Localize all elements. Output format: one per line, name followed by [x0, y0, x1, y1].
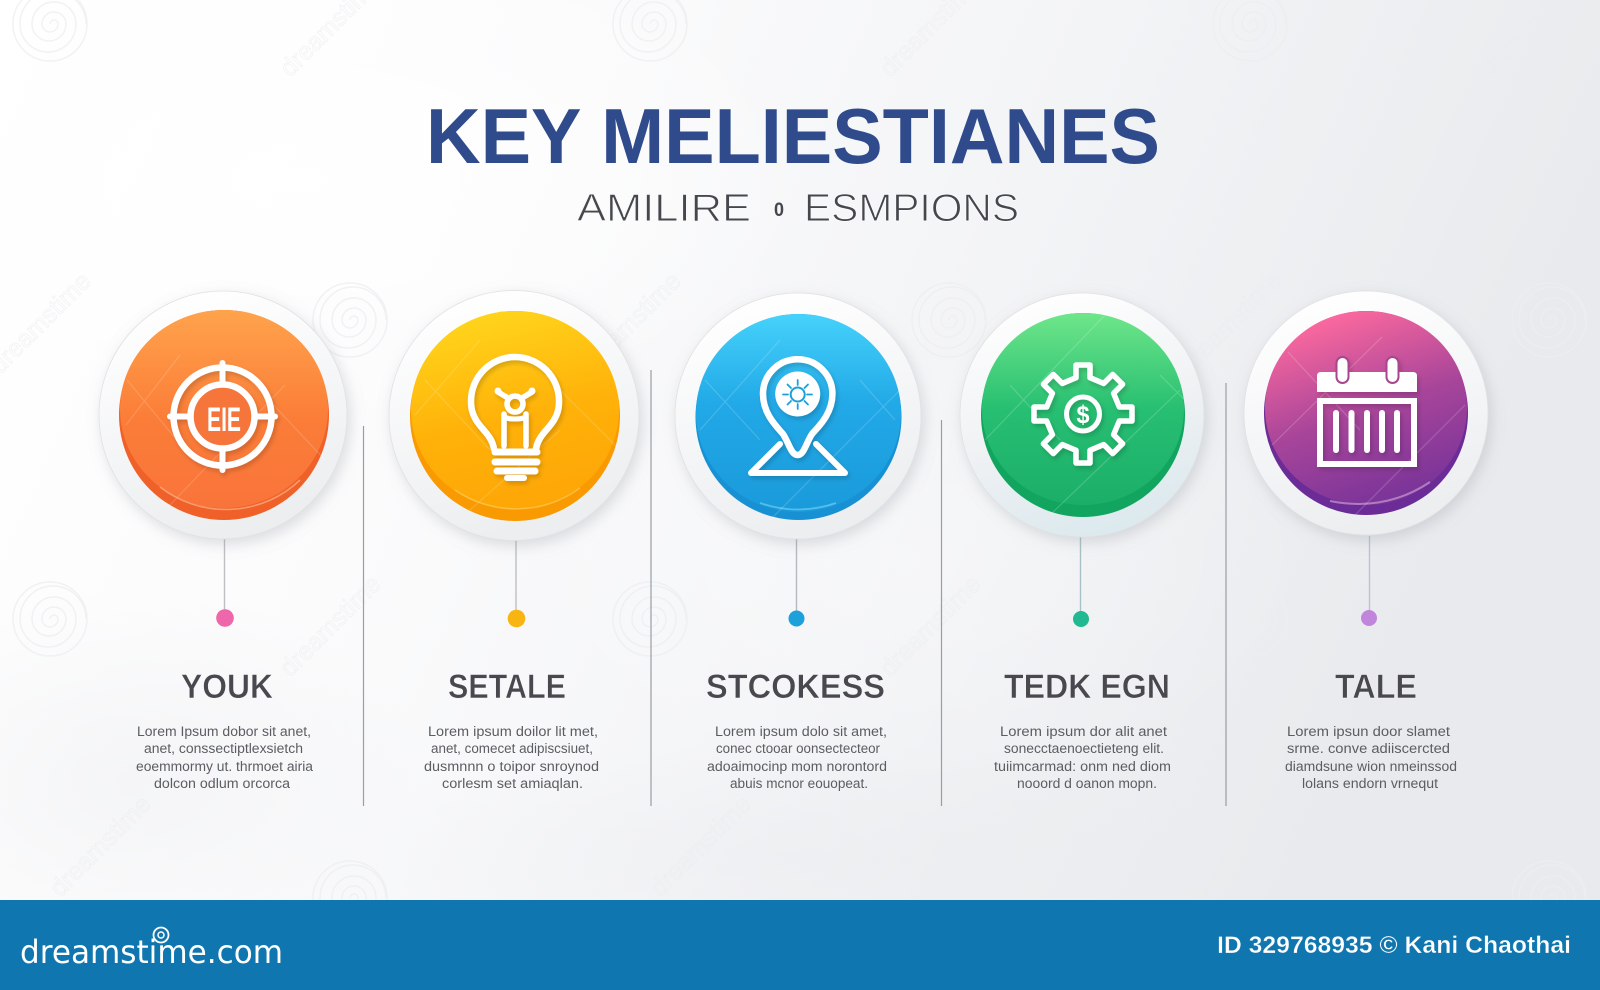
- icon: gear with dollar: $: [1076, 401, 1090, 429]
- description: dolcon odlum orcorca: [154, 776, 291, 791]
- connector and dot: [216, 538, 234, 627]
- description: Lorem ipsun door slamet: [1287, 724, 1450, 739]
- description: eoemmormy ut. thrmoet airia: [136, 759, 313, 774]
- heading: TEDK EGN: [1004, 668, 1170, 706]
- panel: step 1 YOUK: [99, 291, 347, 791]
- description: conec ctooar oonsectecteor: [716, 741, 880, 756]
- badge disc blue: [675, 293, 921, 539]
- description: [707, 724, 887, 791]
- watermark pattern: dreamstime: [1174, 267, 1287, 379]
- icon: light bulb: [471, 357, 559, 478]
- subtitle: 0: [774, 200, 784, 221]
- heading: TALE: [1335, 668, 1417, 706]
- panel: step 2 SETALE: [389, 290, 639, 791]
- watermark pattern: dreamstime: [574, 267, 687, 379]
- column dividers: [364, 370, 1226, 806]
- subtitle: [577, 187, 1019, 230]
- badge disc green: [960, 293, 1204, 537]
- title: KEY MELIESTIANES: [426, 92, 1160, 180]
- description: abuis mcnor eouopeat.: [730, 776, 868, 791]
- connector and dot: [1361, 536, 1377, 626]
- icon: target: [170, 363, 275, 470]
- description: lolans endorn vrnequt: [1302, 776, 1438, 791]
- icon: calendar: [1317, 357, 1417, 464]
- description: [994, 724, 1171, 791]
- watermark pattern: dreamstime: [274, 570, 387, 682]
- icon: gear with dollar: [1034, 365, 1132, 463]
- panel: step 5 TALE: [1244, 291, 1488, 791]
- connector and dot: [788, 539, 804, 626]
- footer logo: dreamstime.com: [20, 933, 283, 971]
- connector and dot: [1073, 537, 1089, 627]
- subtitle: ESMPIONS: [804, 187, 1019, 230]
- description: [136, 724, 313, 791]
- description: [1285, 724, 1457, 791]
- heading: STCOKESS: [706, 668, 885, 706]
- watermark pattern: dreamstime: [1244, 790, 1357, 902]
- badge disc orange: [99, 291, 347, 539]
- panel: step 4 TEDK EGN: [960, 293, 1204, 791]
- badge disc yellow: [389, 290, 639, 540]
- description: Lorem ipsum dor alit anet: [1000, 724, 1167, 739]
- panel: step 3 STCOKESS: [675, 293, 921, 791]
- description: anet, comecet adipiscsiuet,: [431, 741, 593, 756]
- watermark pattern: dreamstime: [1474, 570, 1587, 682]
- description: anet, conssectiptlexsietch: [144, 741, 303, 756]
- icon: target: EIE: [207, 401, 241, 439]
- description: srme. conve adiiscercted: [1287, 741, 1450, 756]
- heading: YOUK: [181, 668, 273, 706]
- description: Lorem ipsum doilor lit met,: [428, 724, 598, 739]
- badge disc purple: [1244, 291, 1488, 535]
- description: corlesm set amiaqlan.: [442, 776, 583, 791]
- description: diamdsune wion nmeinssod: [1285, 759, 1457, 774]
- subtitle: AMILIRE: [577, 187, 751, 230]
- description: adoaimocinp mom norontord: [707, 759, 887, 774]
- description: Lorem Ipsum dobor sit anet,: [137, 724, 311, 739]
- watermark pattern: dreamstime: [644, 790, 757, 902]
- footer bar: [0, 900, 1600, 990]
- description: Lorem ipsum dolo sit amet,: [715, 724, 887, 739]
- heading: SETALE: [448, 668, 566, 706]
- watermark pattern: dreamstime: [874, 570, 987, 682]
- watermark pattern: dreamstime: [44, 790, 157, 902]
- footer credit: ID 329768935 © Kani Chaothai: [1217, 932, 1571, 959]
- icon: map pin: [751, 359, 845, 473]
- connector and dot: [508, 539, 525, 627]
- description: tuiimcarmad: onm ned diom: [994, 759, 1171, 774]
- description: [424, 724, 599, 791]
- description: sonecctaenoectieteng elit.: [1004, 741, 1164, 756]
- description: nooord d oanon mopn.: [1017, 776, 1157, 791]
- description: dusmnnn o toipor snroynod: [424, 759, 599, 774]
